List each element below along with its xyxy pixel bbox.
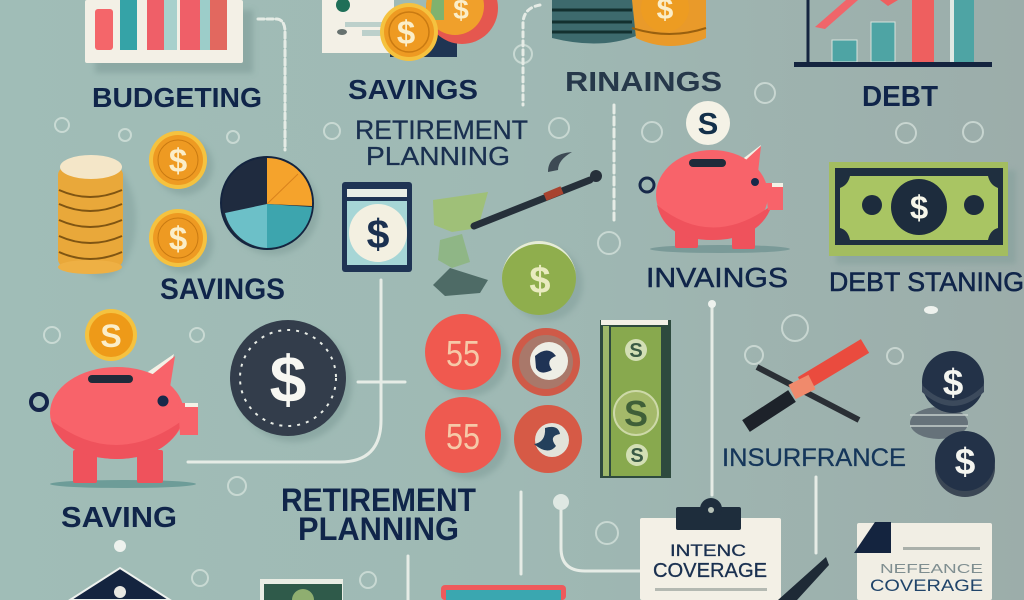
chart: pie chart (221, 157, 319, 255)
icon: vertical banknote (600, 320, 671, 478)
heading: retirement planning bottom: RETIREMENT (281, 482, 476, 518)
icon: gold coin lower: $ (169, 220, 187, 257)
icon: house (70, 568, 170, 600)
icon: red coin lower left: 55 (446, 416, 480, 457)
heading: retirement planning top: RETIREMENT (355, 115, 528, 145)
icon: broken green shapes (433, 192, 488, 296)
heading: savings middle: SAVINGS (160, 273, 285, 306)
icon: gold coin upper: $ (169, 142, 187, 179)
icon: banknote: $ (910, 189, 928, 226)
icon: dark dollar coin stack: $ (943, 362, 964, 403)
icon: gold coin upper (149, 131, 213, 195)
icon: banknote bottom (260, 579, 343, 600)
icon: calculator with dollar (342, 182, 412, 272)
icon: white S coin: S (698, 106, 718, 141)
icon: coverage document: COVERAGE (870, 576, 983, 595)
icon: calculator with dollar: $ (367, 211, 390, 257)
icon: piggy bank right (640, 145, 790, 253)
icon: crossed pen and stick (746, 346, 865, 426)
icon: vertical banknote: S (624, 393, 648, 434)
icon: vertical banknote: S (630, 445, 644, 467)
icon: red coin lower left (425, 397, 508, 479)
icon: savings document with coins: $ (397, 14, 415, 51)
icon: clipboard with coverage text: INTENC (670, 541, 746, 560)
heading: debt: DEBT (862, 81, 938, 113)
heading: retirement planning bottom (281, 482, 476, 547)
heading: insurance: INSURFRANCE (722, 444, 906, 472)
heading: budgeting: BUDGETING (92, 82, 262, 113)
icon: gold coin lower (149, 209, 213, 273)
icon: red coin upper left (425, 314, 508, 396)
heading: invaings: INVAINGS (646, 262, 788, 293)
heading: retirement planning bottom: PLANNING (298, 511, 459, 547)
icon: clipboard with coverage text (640, 498, 781, 600)
icon: green coin: $ (529, 260, 551, 302)
heading: retirement planning top (355, 115, 528, 171)
heading: savings top: SAVINGS (348, 74, 478, 105)
icon: stack of gold coins (58, 155, 136, 278)
icon: coverage document: NEFEANCE (880, 561, 983, 576)
icon: dark dollar coin (230, 320, 352, 442)
icon: pen (778, 557, 829, 600)
heading: debt staning: DEBT STANING (829, 267, 1024, 297)
icon: vertical banknote: S (629, 340, 643, 362)
icon: coin stacks top (552, 0, 706, 46)
heading: retirement planning top: PLANNING (366, 141, 510, 171)
icon: savings document with coins (322, 0, 498, 61)
icon: gold coin above piggy (85, 309, 137, 361)
icon: dark dollar coin stack: $ (955, 441, 976, 482)
icon: piggy bank left (31, 354, 198, 488)
panel: budgeting bar chart (85, 0, 253, 73)
connector lines (188, 5, 816, 600)
icon: dark dollar coin: $ (270, 342, 306, 416)
icon: gold coin above piggy: S (100, 318, 122, 354)
chart: debt bars with arrow (794, 0, 992, 67)
icon: red tablet bottom (441, 585, 566, 600)
heading: rinaings: RINAINGS (565, 66, 722, 97)
icon: stick tool (474, 152, 602, 226)
icon: white S coin (686, 101, 730, 145)
icon: red coin upper right (512, 328, 580, 396)
icon: red coin upper left: 55 (446, 333, 480, 374)
icon: green coin (502, 241, 583, 321)
heading: saving: SAVING (61, 502, 177, 534)
icon: red coin lower right (514, 405, 582, 473)
icon: dark dollar coin stack (910, 351, 995, 497)
icon: banknote (829, 162, 1016, 264)
icon: clipboard with coverage text: COVERAGE (653, 560, 767, 582)
icon: coverage document (854, 522, 992, 600)
